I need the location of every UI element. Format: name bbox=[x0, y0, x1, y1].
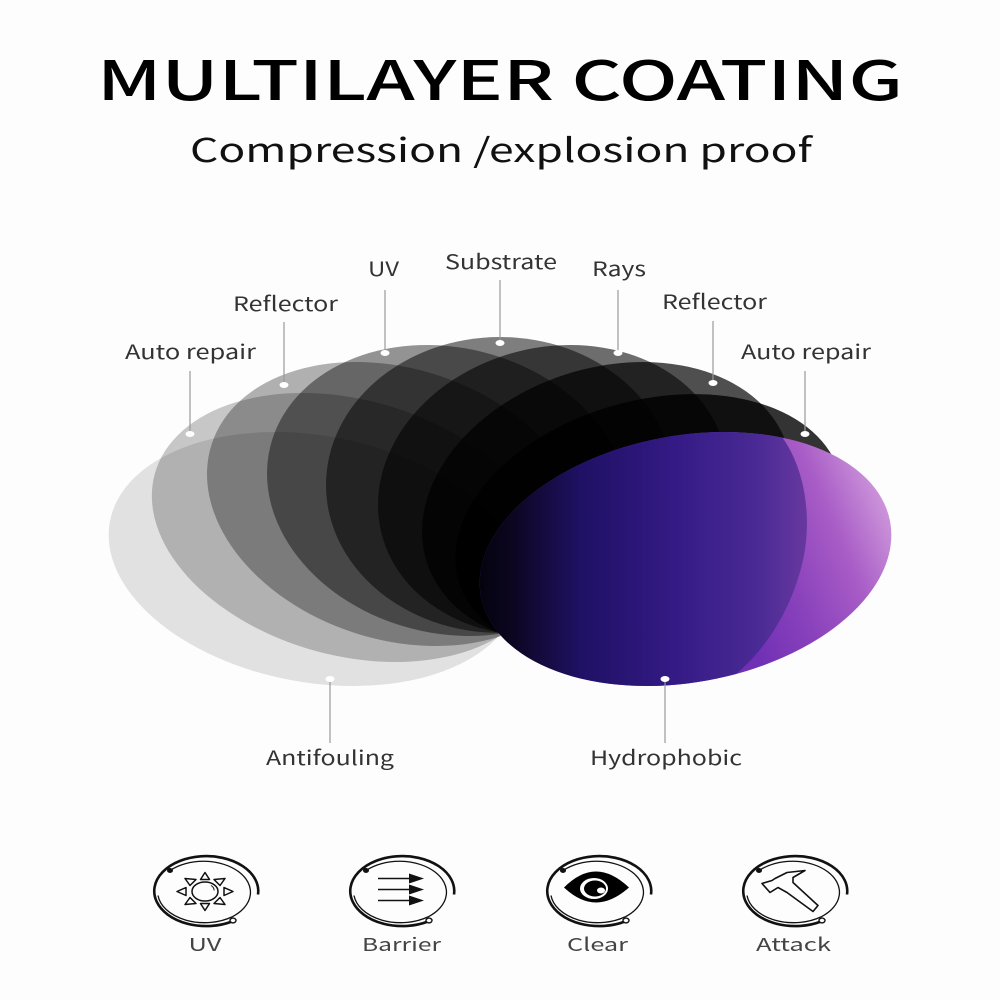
icon: attack hammer bbox=[743, 856, 847, 926]
layer 4: UV bbox=[236, 308, 660, 673]
label: clear: Clear bbox=[567, 931, 629, 957]
layer 7: reflector bbox=[385, 316, 829, 692]
callout: antifouling: Antifouling bbox=[266, 742, 394, 771]
layer 8: auto repair bbox=[424, 352, 874, 702]
label: attack: Attack bbox=[756, 931, 831, 957]
callout: auto repair left bbox=[125, 336, 256, 437]
callout: UV: UV bbox=[368, 253, 400, 282]
callout: UV bbox=[368, 253, 400, 356]
callout: rays: Rays bbox=[592, 253, 646, 282]
callout: reflector left: Reflector bbox=[233, 288, 338, 317]
subtitle: Compression /explosion proof bbox=[190, 124, 814, 172]
callout: antifouling bbox=[266, 676, 394, 771]
icon: UV sun bbox=[154, 856, 258, 926]
callout: hydrophobic bbox=[590, 676, 742, 771]
layer 3: reflector bbox=[170, 315, 622, 693]
callout: reflector right: Reflector bbox=[662, 286, 767, 315]
diagram: fanned lens coating layers bbox=[108, 337, 892, 686]
icon: clear eye bbox=[547, 856, 651, 926]
icon: barrier arrows bbox=[350, 856, 454, 926]
callout: substrate: Substrate bbox=[445, 246, 557, 275]
title: MULTILAYER COATING bbox=[97, 37, 903, 116]
callout: hydrophobic: Hydrophobic bbox=[590, 742, 742, 771]
callout: rays bbox=[592, 253, 646, 356]
callout: substrate bbox=[445, 246, 557, 346]
layer 2: auto repair bbox=[121, 350, 577, 705]
callout: auto repair right bbox=[741, 336, 871, 437]
label: barrier: Barrier bbox=[362, 931, 442, 957]
layer 9: hydrophobic purple lens bbox=[480, 432, 892, 686]
callout: auto repair left: Auto repair bbox=[125, 336, 256, 365]
callout: reflector right bbox=[662, 286, 767, 386]
layer 1: antifouling bbox=[88, 400, 541, 718]
layer 5: substrate bbox=[326, 337, 674, 633]
layer 6: rays bbox=[347, 309, 759, 672]
label: UV: UV bbox=[188, 931, 222, 957]
callout: auto repair right: Auto repair bbox=[741, 336, 871, 365]
callout: reflector left bbox=[233, 288, 338, 388]
